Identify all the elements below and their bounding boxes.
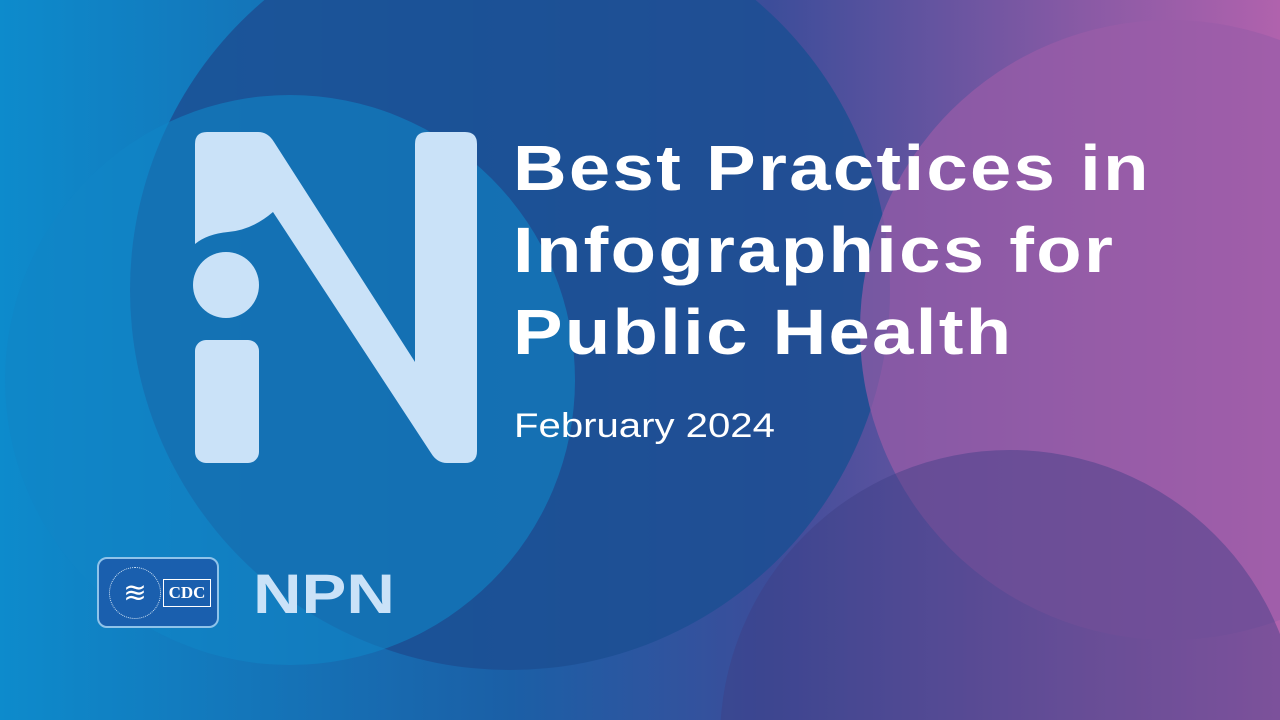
i dot [193, 252, 259, 318]
title [513, 132, 1151, 368]
title: Best Practices in [513, 132, 1151, 204]
title: Public Health [513, 296, 1013, 368]
logo: NPN: NPN [253, 562, 395, 625]
date: February 2024 [514, 407, 775, 445]
N shape [195, 132, 477, 463]
title: Infographics for [513, 214, 1115, 286]
logo: HHS CDC [97, 557, 219, 628]
logo: HHS CDC: CDC [169, 583, 205, 602]
logo: HHS CDC: ≋ [123, 577, 147, 608]
i stem [195, 340, 259, 463]
